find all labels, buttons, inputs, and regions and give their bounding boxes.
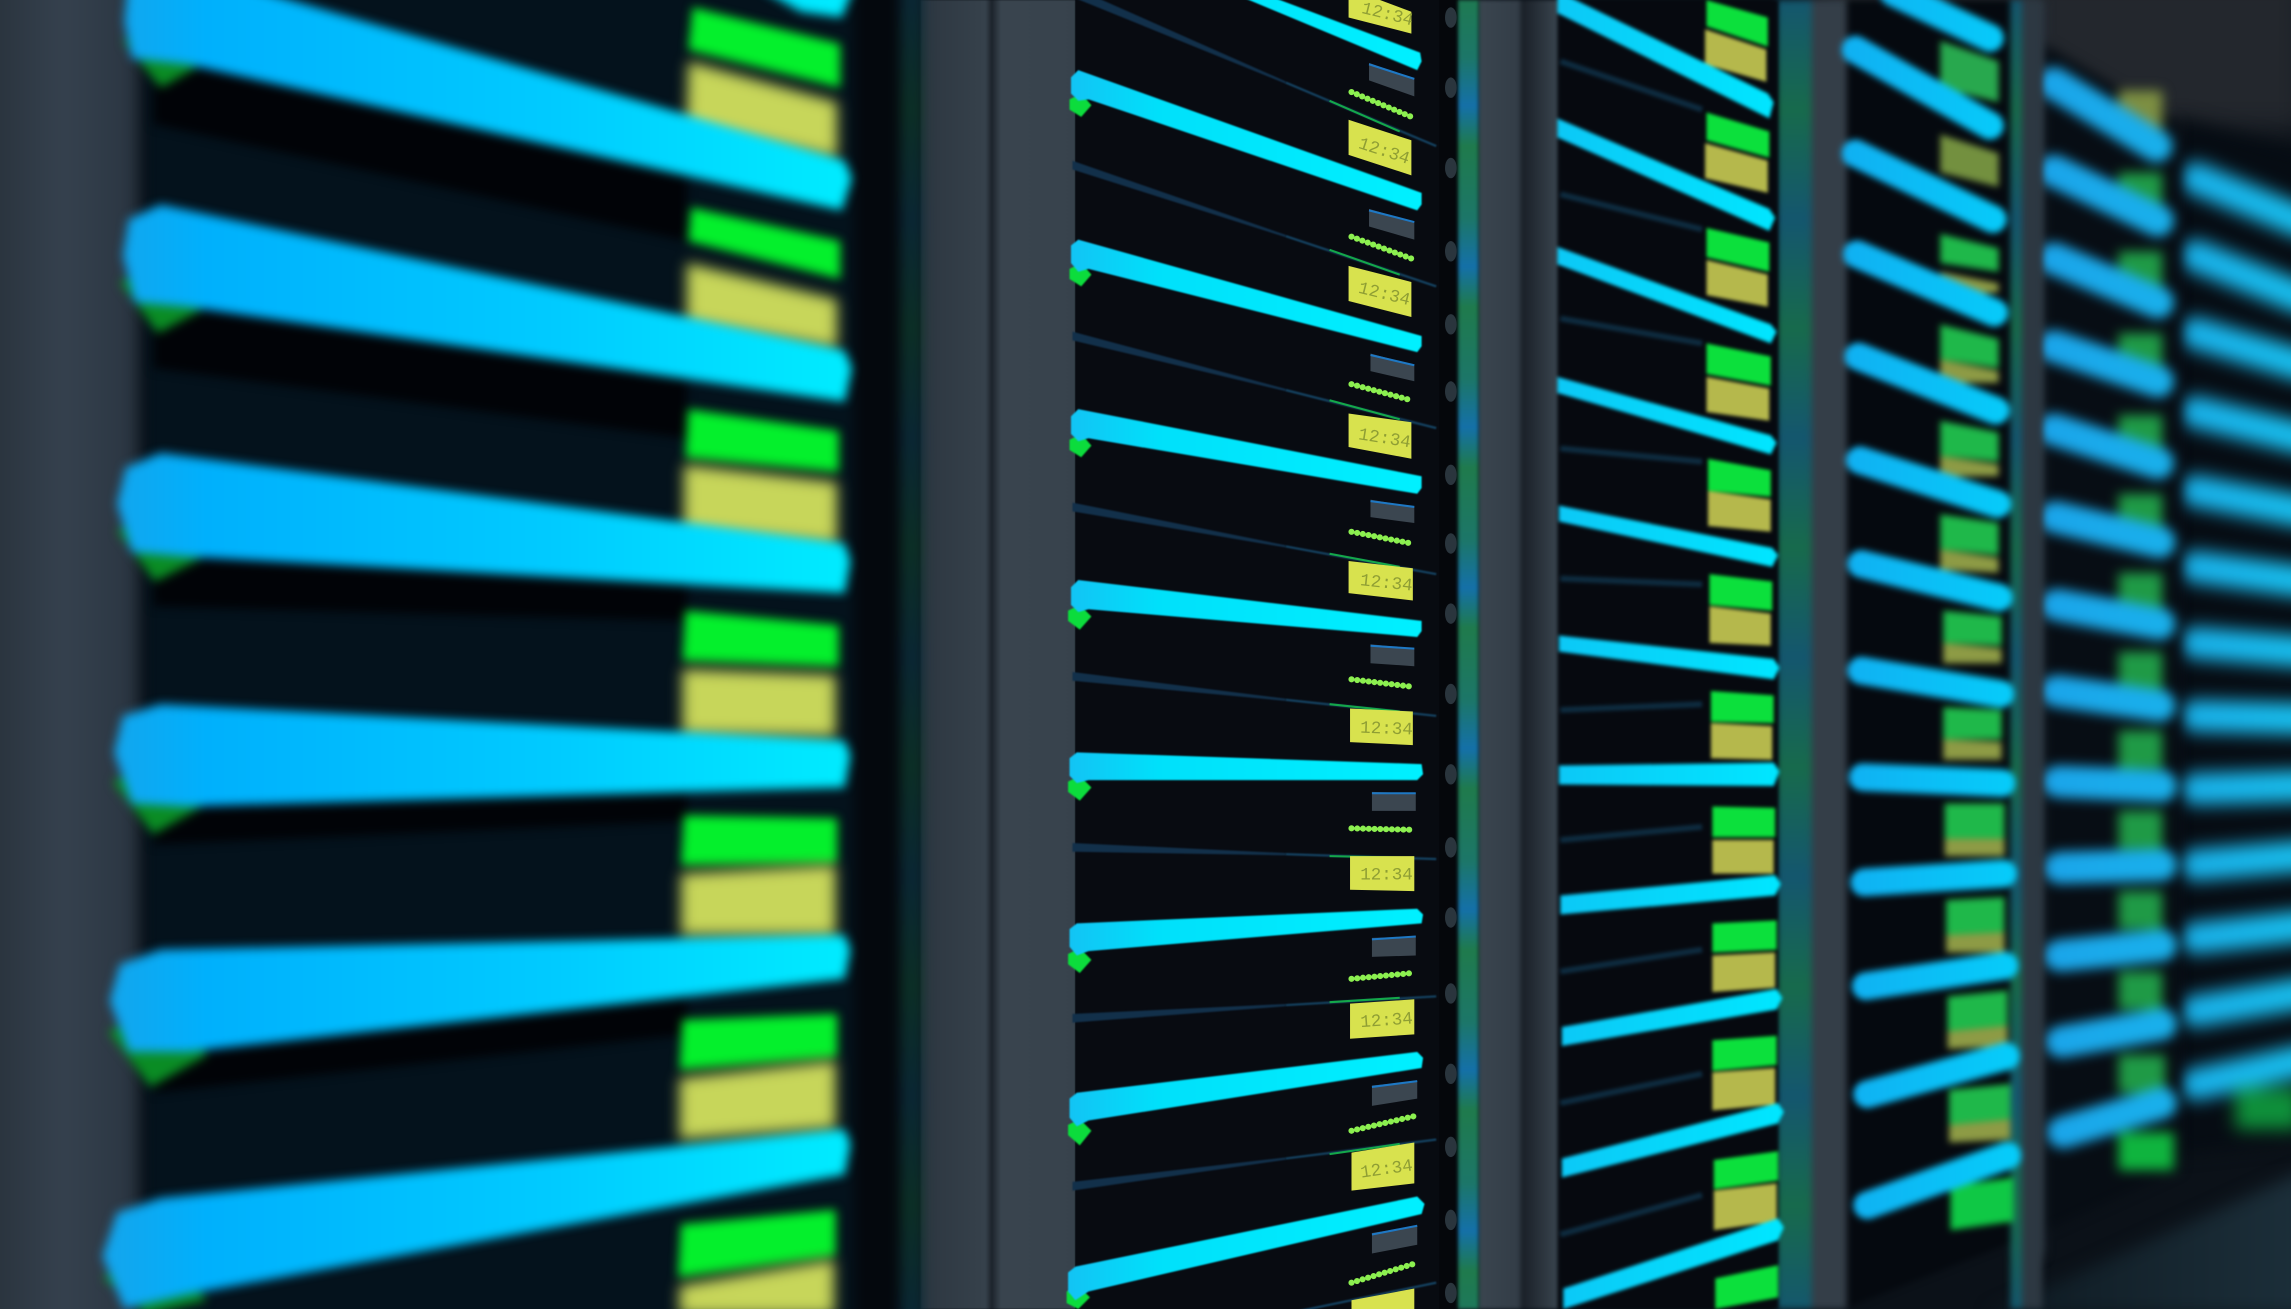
- rack 3 light bars: [1557, 0, 1784, 1309]
- rack 5 light bars: [2054, 83, 2161, 1132]
- rack 2 faceplate: [1075, 0, 1441, 1309]
- rack 2 green LED diamonds: [1067, 94, 1091, 1309]
- rack 3 status blocks: [1705, 0, 1778, 1309]
- rack 3 divider lines: [1560, 61, 1702, 1234]
- rack 1: foreground server rack, out of focus: [102, 0, 853, 1309]
- left foreground pillar: [0, 0, 139, 1309]
- rack 2 LCD displays: 12:34: [1356, 134, 1412, 170]
- rack 2 LED dot rows: [1351, 92, 1414, 1283]
- rack 2 LCD displays: [1349, 0, 1415, 1309]
- rack 1 shadow bands: [154, 58, 687, 1093]
- rack 2 LCD displays: 12:34: [1360, 719, 1413, 741]
- rack 1 light bars: [102, 0, 853, 1309]
- rack 1 panel background: [146, 0, 923, 1309]
- rack 2 LCD displays: 12:34: [1357, 425, 1412, 453]
- rack 2 grey indicator panels: [1369, 63, 1417, 1253]
- rack 2 blue panel edges: [1369, 64, 1417, 1234]
- rack 2 LCD displays: 12:34: [1359, 1156, 1414, 1184]
- rack 6 light bars: [2196, 178, 2291, 1084]
- rack 2 LCD displays: 12:34: [1359, 571, 1413, 597]
- rack 2 tapered divider bands: [1072, 0, 1286, 1191]
- rack 4: mid-distance rack: [1777, 0, 2043, 1309]
- rack 2 light bars: [1068, 0, 1425, 1300]
- rack 1 green LED diamonds: [102, 22, 208, 1309]
- rack 6: farthest rack: [2177, 117, 2291, 1154]
- rack 3: server rack, slightly out of focus: [1479, 0, 1784, 1309]
- rack 1 green status blocks: [678, 7, 840, 1277]
- rack 2 divider lines: [1140, 83, 1436, 1309]
- rack 2: server rack in sharp focus: [921, 0, 1479, 1309]
- rack 1 yellow status blocks: [679, 61, 837, 1309]
- rack 4 light bars: [1856, 0, 2007, 1205]
- rack 2 LCD displays: 12:34: [1360, 1009, 1414, 1033]
- rack 2 right rail: [1439, 0, 1479, 1309]
- rack 2 LCD displays: 12:34: [1356, 279, 1412, 311]
- rack 5: far rack: [2019, 0, 2180, 1256]
- rack 4 status blocks: [1940, 41, 2013, 1230]
- rack 2 LCD displays: 12:34: [1360, 865, 1413, 885]
- rack 5 status blocks: [2118, 91, 2174, 1170]
- rack 2 green divider glints: [1330, 101, 1400, 1154]
- rack 2 pillar: [921, 0, 1075, 1309]
- rack 2 LCD displays: 12:34: [1359, 0, 1415, 31]
